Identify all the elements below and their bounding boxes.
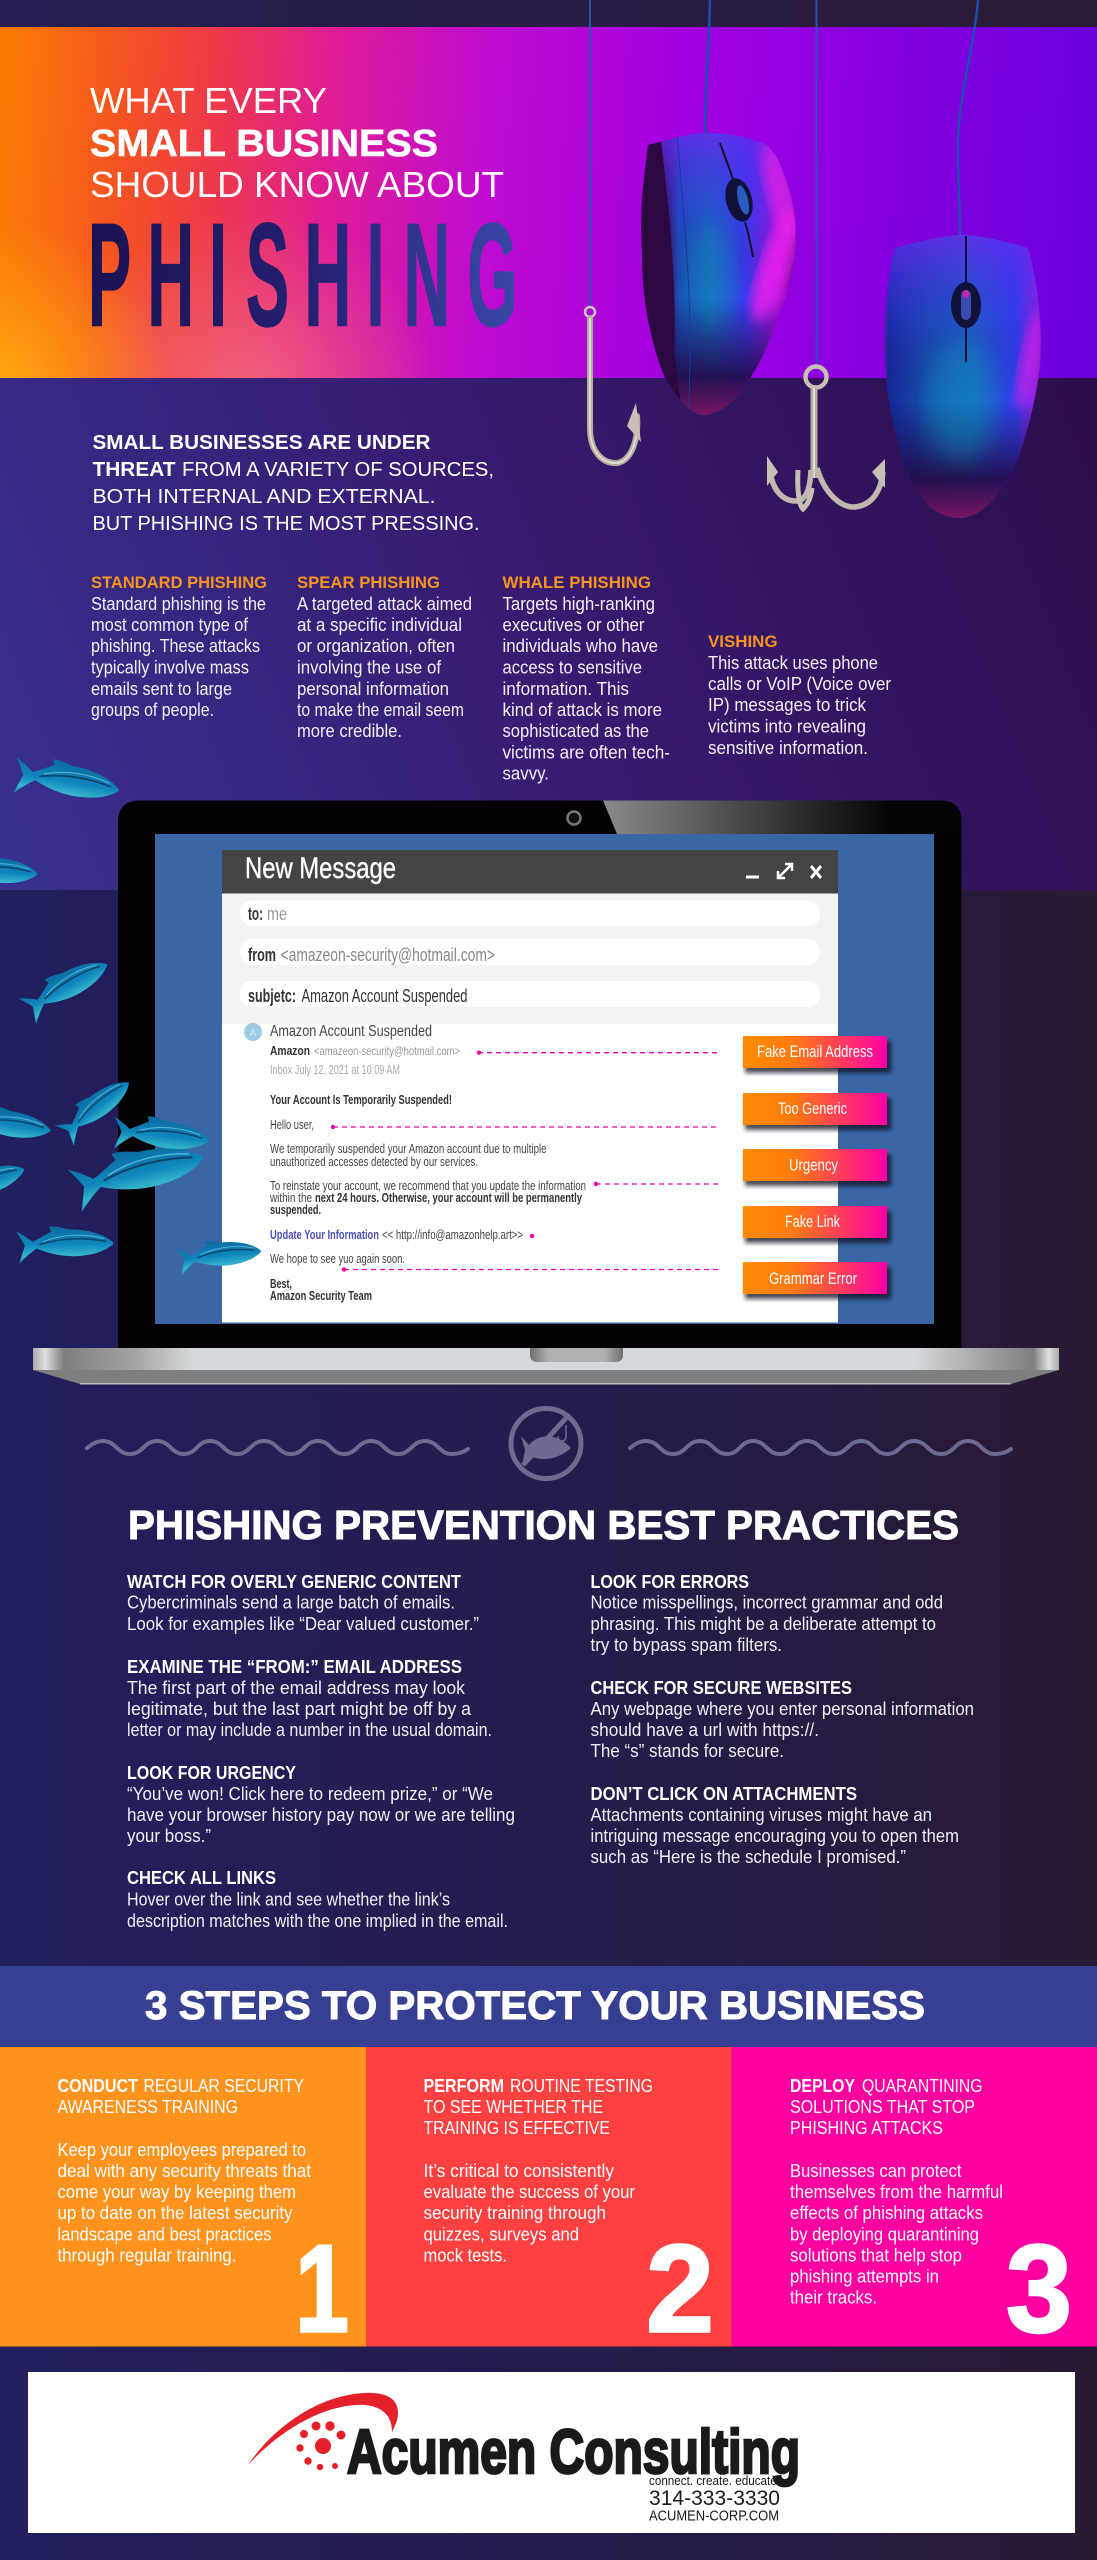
column: spear phishing: A targeted attack aimed — [297, 594, 472, 614]
tip: secure websites — [590, 1678, 974, 1761]
tip: errors: phrasing. This might be a deliberate attempt to — [590, 1614, 936, 1634]
tip: secure websites: should have a url with https://. — [590, 1720, 819, 1740]
email body: suspended. — [270, 1203, 321, 1217]
step 1 panel: AWARENESS TRAINING — [58, 2097, 238, 2117]
column: standard phishing: most common type of — [91, 615, 249, 635]
tagline and contact — [649, 2473, 780, 2524]
column: spear phishing: SPEAR PHISHING — [297, 574, 440, 592]
tip: urgency — [127, 1763, 515, 1846]
tagline and contact: connect. create. educate. — [649, 2473, 780, 2488]
email window — [222, 850, 838, 1322]
email body: Hello user, — [270, 1118, 314, 1132]
fish in front of laptop — [16, 1070, 263, 1276]
step 1 panel: landscape and best practices — [58, 2224, 272, 2244]
email body — [244, 1023, 586, 1303]
button: urgency: Urgency — [789, 1156, 838, 1174]
column: spear phishing: involving the use of — [297, 658, 442, 678]
column: vishing: VISHING — [708, 633, 778, 651]
wave divider right — [630, 1441, 1011, 1454]
email body: Amazon — [270, 1043, 310, 1058]
email body: next 24 hours. Otherwise, your account will be permanently — [315, 1191, 582, 1205]
step 3 panel — [732, 2047, 1097, 2358]
tip: errors: LOOK FOR ERRORS — [590, 1572, 749, 1592]
email body: Amazon Account Suspended — [270, 1023, 432, 1040]
step 1 panel: CONDUCT — [58, 2076, 138, 2096]
footer logo panel — [28, 2372, 1075, 2533]
tip: attachments — [590, 1784, 959, 1867]
column: whale phishing: victims are often tech- — [502, 742, 670, 762]
column: whale phishing: WHALE PHISHING — [502, 574, 651, 592]
intro text — [92, 432, 494, 535]
column: whale phishing: individuals who have — [502, 636, 658, 656]
tip: from address: The first part of the email address may look — [127, 1678, 466, 1698]
email body: A — [250, 1028, 257, 1039]
button: grammar error — [743, 1262, 891, 1299]
step 2 panel: ROUTINE TESTING — [510, 2076, 653, 2096]
column: whale phishing: Targets high-ranking — [502, 594, 655, 614]
tip: from address: EXAMINE THE “FROM:” EMAIL ADDRESS — [127, 1657, 462, 1677]
intro text: THREAT — [92, 459, 176, 481]
title word: PHISHING: PHISHING — [88, 193, 518, 358]
column: vishing: IP) messages to trick — [708, 695, 867, 715]
step 3 panel: themselves from the harmful — [790, 2182, 1003, 2202]
email body: unauthorized accesses detected by our services. — [270, 1155, 478, 1169]
heading: best practices: PHISHING PREVENTION BEST PRACTICES — [128, 1502, 959, 1548]
email body: We temporarily suspended your Amazon account due to multiple — [270, 1142, 547, 1156]
column: whale phishing: executives or other — [502, 615, 645, 635]
laptop — [33, 800, 1059, 1384]
hero banner — [0, 27, 1097, 378]
button: fake link: Fake Link — [785, 1212, 840, 1231]
step 2 panel: TO SEE WHETHER THE — [424, 2097, 603, 2117]
number 3: 3 — [1006, 2220, 1072, 2358]
best practices: right column — [590, 1572, 974, 1867]
mouse 2 with cable — [880, 0, 1050, 522]
intro text: SMALL BUSINESSES ARE UNDER — [92, 432, 431, 454]
tip: from address — [127, 1657, 492, 1740]
address fields: me — [267, 904, 287, 924]
tip: generic content: Look for examples like “Dear valued customer.” — [127, 1614, 479, 1634]
title bar — [222, 850, 838, 894]
tip: generic content — [127, 1572, 479, 1634]
column: whale phishing: sophisticated as the — [502, 721, 649, 741]
tip: urgency: your boss.” — [127, 1826, 211, 1846]
step 3 panel: DEPLOY — [790, 2076, 855, 2096]
step 1 panel: through regular training. — [58, 2246, 236, 2266]
column: vishing: sensitive information. — [708, 738, 868, 758]
step 1 panel: REGULAR SECURITY — [144, 2076, 304, 2096]
tip: generic content: Cybercriminals send a large batch of emails. — [127, 1592, 455, 1612]
column: spear phishing: more credible. — [297, 721, 402, 741]
column: standard phishing: Standard phishing is the — [91, 594, 266, 614]
tip: urgency: have your browser history pay now or we are telling — [127, 1805, 515, 1825]
button: fake email address — [743, 1036, 891, 1073]
logo wordmark: Acumen Consulting — [347, 2418, 800, 2487]
email body: Amazon Security Team — [270, 1289, 372, 1303]
icon: no fishing — [511, 1408, 581, 1478]
email body: Your Account Is Temporarily Suspended! — [270, 1093, 452, 1107]
column: standard phishing: STANDARD PHISHING — [91, 574, 267, 592]
column: vishing: This attack uses phone — [708, 653, 878, 673]
column: whale phishing: access to sensitive — [502, 658, 642, 678]
step 3 panel: phishing attempts in — [790, 2266, 939, 2286]
tip: links — [127, 1868, 508, 1931]
column: standard phishing: groups of people. — [91, 700, 214, 720]
dashed callout lines — [331, 1050, 719, 1272]
step 2 panel: security training through — [424, 2203, 606, 2223]
callout buttons — [743, 1036, 891, 1299]
tip: from address: legitimate, but the last part might be off by a — [127, 1699, 472, 1719]
intro text: FROM A VARIETY OF SOURCES, — [182, 459, 494, 481]
email body: Update Your Information — [270, 1228, 379, 1242]
email body: << http://info@amazonhelp.art>> — [382, 1228, 523, 1242]
step 3 panel: their tracks. — [790, 2288, 877, 2308]
tip: links: Hover over the link and see whether the link’s — [127, 1890, 450, 1910]
column: spear phishing: or organization, often — [297, 636, 455, 656]
step 3 panel: by deploying quarantining — [790, 2224, 979, 2244]
laptop screen — [155, 834, 934, 1324]
step 1 panel — [0, 2047, 366, 2358]
tip: urgency: “You’ve won! Click here to redeem prize,” or “We — [127, 1784, 493, 1804]
tip: secure websites: Any webpage where you enter personal information — [590, 1699, 974, 1719]
step 1 panel: come your way by keeping them — [58, 2182, 296, 2202]
button: fake email address: Fake Email Address — [757, 1042, 873, 1061]
address fields: Amazon Account Suspended — [302, 986, 468, 1006]
title: WHAT EVERY — [90, 80, 327, 121]
step 2 panel: TRAINING IS EFFECTIVE — [424, 2118, 610, 2138]
intro text: BUT PHISHING IS THE MOST PRESSING. — [92, 513, 480, 535]
column: vishing: calls or VoIP (Voice over — [708, 674, 891, 694]
column: vishing — [708, 633, 891, 758]
title: SHOULD KNOW ABOUT — [90, 164, 504, 205]
tip: secure websites: The “s” stands for secure. — [590, 1741, 784, 1761]
intro text: BOTH INTERNAL AND EXTERNAL. — [92, 486, 436, 508]
column: standard phishing: emails sent to large — [91, 679, 232, 699]
email body: We hope to see yuo again soon. — [270, 1252, 405, 1266]
column: spear phishing: to make the email seem — [297, 700, 464, 720]
title: SMALL BUSINESS — [90, 123, 438, 165]
tip: generic content: WATCH FOR OVERLY GENERIC CONTENT — [127, 1572, 461, 1592]
button: urgency — [743, 1149, 891, 1186]
button: too generic: Too Generic — [778, 1099, 847, 1118]
column: spear phishing: at a specific individual — [297, 615, 462, 635]
column: whale phishing: information. This — [502, 679, 629, 699]
column: vishing: victims into revealing — [708, 716, 866, 736]
step 2 panel: quizzes, surveys and — [424, 2224, 579, 2244]
tip: attachments: Attachments containing viruses might have an — [590, 1805, 932, 1825]
address fields: from — [248, 945, 276, 965]
tip: errors: Notice misspellings, incorrect grammar and odd — [590, 1592, 943, 1612]
step 3 panel: SOLUTIONS THAT STOP — [790, 2097, 975, 2117]
laptop base — [33, 1370, 1059, 1384]
tip: attachments: intriguing message encouraging you to open them — [590, 1826, 959, 1846]
step 3 panel: effects of phishing attacks — [790, 2203, 983, 2223]
laptop camera — [568, 812, 580, 824]
email body: To reinstate your account, we recommend that you update the information — [270, 1179, 586, 1193]
best practices: left column — [127, 1572, 515, 1931]
hook: treble — [767, 0, 885, 509]
column: standard phishing: typically involve mass — [91, 658, 249, 678]
step 3 panel: PHISHING ATTACKS — [790, 2118, 943, 2138]
email body: Inbox July 12, 2021 at 10:09 AM — [270, 1063, 400, 1077]
step 3 panel: Businesses can protect — [790, 2161, 962, 2181]
column: spear phishing: personal information — [297, 679, 449, 699]
tagline and contact: 314-333-3330 — [649, 2487, 780, 2510]
step 2 panel: evaluate the success of your — [424, 2182, 635, 2202]
step 1 panel: up to date on the latest security — [58, 2203, 292, 2223]
logo swoosh — [248, 2393, 398, 2465]
tip: from address: letter or may include a number in the usual domain. — [127, 1720, 492, 1740]
step 2 panel: It’s critical to consistently — [424, 2161, 614, 2181]
step 2 panel — [366, 2047, 732, 2358]
column: whale phishing — [502, 574, 670, 784]
button: too generic — [743, 1093, 891, 1130]
laptop lid glare — [603, 800, 962, 834]
button: fake link — [743, 1206, 891, 1243]
tip: attachments: DON’T CLICK ON ATTACHMENTS — [590, 1784, 857, 1804]
step 2 panel: mock tests. — [424, 2246, 507, 2266]
column: standard phishing — [91, 574, 267, 720]
address fields: to: — [248, 904, 263, 924]
logo dots — [296, 2421, 346, 2470]
tip: links: CHECK ALL LINKS — [127, 1868, 276, 1888]
column: standard phishing: phishing. These attacks — [91, 636, 260, 656]
column: spear phishing — [297, 574, 472, 741]
step 2 panel: PERFORM — [424, 2076, 504, 2096]
column: whale phishing: savvy. — [502, 764, 549, 784]
mouse 1 with cable — [640, 0, 807, 420]
address fields: <amazeon-security@hotmail.com> — [280, 945, 495, 965]
email body: <amazeon-security@hotmail.com> — [314, 1044, 460, 1058]
title bar: New Message — [245, 852, 396, 885]
step 1 panel: deal with any security threats that — [58, 2161, 311, 2181]
tip: secure websites: CHECK FOR SECURE WEBSITES — [590, 1678, 852, 1698]
tip: urgency: LOOK FOR URGENCY — [127, 1763, 296, 1783]
tip: links: description matches with the one implied in the email. — [127, 1911, 508, 1931]
tip: errors — [590, 1572, 943, 1655]
tagline and contact: ACUMEN-CORP.COM — [649, 2508, 779, 2524]
address fields — [222, 894, 838, 1024]
laptop lid — [118, 800, 962, 1350]
band: 3 steps heading: 3 STEPS TO PROTECT YOUR BUSINESS — [145, 1984, 925, 2028]
band: 3 steps heading — [0, 1966, 1097, 2047]
number 1: 1 — [295, 2220, 349, 2358]
email body: Best, — [270, 1277, 292, 1291]
hook: single — [585, 0, 641, 463]
step 3 panel: solutions that help stop — [790, 2246, 962, 2266]
column: whale phishing: kind of attack is more — [502, 700, 662, 720]
fish behind laptop, left edge — [0, 753, 123, 1216]
email body: within the — [269, 1191, 312, 1205]
number 2: 2 — [646, 2220, 714, 2358]
tip: attachments: such as “Here is the schedule I promised.” — [590, 1847, 906, 1867]
address fields: subjetc: — [248, 986, 296, 1006]
step 3 panel: QUARANTINING — [862, 2076, 982, 2096]
tip: errors: try to bypass spam filters. — [590, 1635, 782, 1655]
step 1 panel: Keep your employees prepared to — [58, 2140, 306, 2160]
button: grammar error: Grammar Error — [769, 1269, 857, 1288]
title — [90, 80, 504, 205]
wave divider left — [87, 1441, 468, 1454]
